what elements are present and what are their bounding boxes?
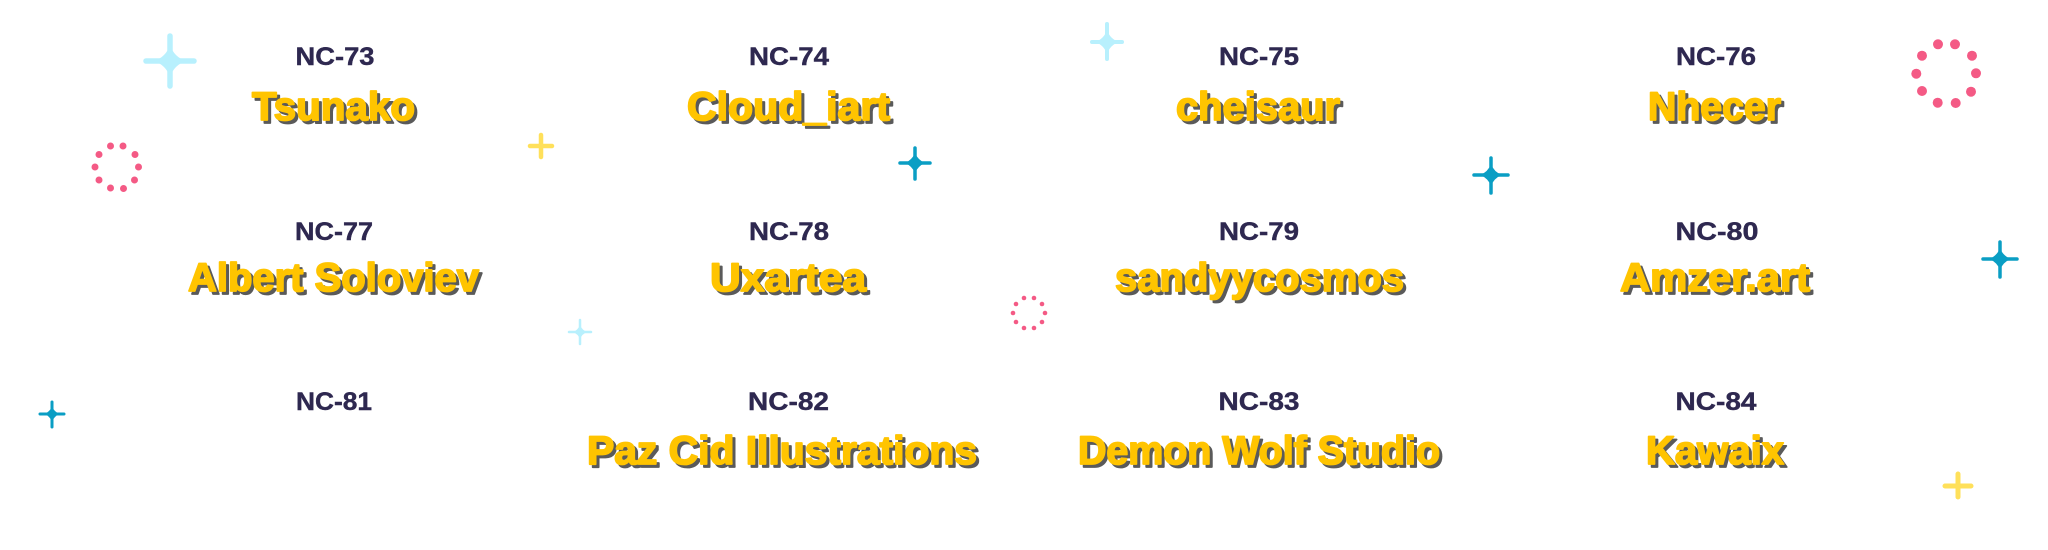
icon: yellow plus sparkle right	[1945, 474, 1971, 497]
label: NC-78: NC-78	[749, 218, 829, 246]
icon: light blue sparkle small	[569, 320, 591, 344]
label: NC-84: NC-84	[1676, 388, 1757, 416]
icon: pink dotted ring left	[92, 142, 142, 192]
name: Paz Cid Illustrations: Paz Cid Illustrations	[590, 432, 980, 476]
name: sandyycosmos: sandyycosmos	[1115, 256, 1404, 300]
label: NC-74: NC-74	[749, 43, 829, 71]
icon: pink dotted ring right	[1911, 39, 1981, 108]
label: NC-79: NC-79	[1219, 218, 1299, 246]
label: NC-80: NC-80	[1676, 218, 1758, 246]
label: NC-77: NC-77	[295, 218, 373, 246]
name: cheisaur: cheisaur	[1176, 85, 1340, 129]
icon: light blue sparkle large	[146, 36, 194, 86]
name: Amzer.art: Amzer.art	[1620, 256, 1810, 300]
name: Demon Wolf Studio: Demon Wolf Studio	[1078, 429, 1440, 473]
label: NC-76: NC-76	[1676, 43, 1756, 71]
name: Albert Soloviev: Albert Soloviev	[191, 259, 483, 303]
name: Albert Soloviev: Albert Soloviev	[188, 256, 480, 300]
name: Cloud_iart: Cloud_iart	[690, 88, 893, 132]
name: Tsunako: Tsunako	[252, 85, 415, 129]
name: Tsunako: Tsunako	[255, 88, 418, 132]
name: Amzer.art: Amzer.art	[1623, 259, 1813, 303]
name: Kawaix: Kawaix	[1649, 432, 1787, 476]
name: Nhecer: Nhecer	[1648, 85, 1781, 129]
label: NC-83: NC-83	[1218, 388, 1300, 416]
icon: teal sparkle	[900, 148, 930, 179]
name: Nhecer: Nhecer	[1651, 88, 1784, 132]
icon: teal sparkle left	[40, 402, 64, 427]
icon: teal sparkle	[1474, 158, 1508, 193]
name: Kawaix: Kawaix	[1646, 429, 1784, 473]
name: Uxartea: Uxartea	[713, 259, 870, 303]
name: sandyycosmos: sandyycosmos	[1118, 259, 1407, 303]
name: Paz Cid Illustrations: Paz Cid Illustrations	[587, 429, 977, 473]
name: cheisaur: cheisaur	[1179, 88, 1343, 132]
label: NC-81: NC-81	[296, 388, 372, 416]
icon: yellow plus sparkle	[530, 135, 552, 157]
icon: pink dotted ring small	[1011, 296, 1047, 330]
icon: light blue sparkle top	[1092, 24, 1122, 59]
name: Cloud_iart: Cloud_iart	[687, 85, 890, 129]
icon: teal sparkle right	[1983, 242, 2017, 277]
name: Uxartea: Uxartea	[710, 256, 867, 300]
label: NC-82: NC-82	[748, 388, 829, 416]
label: NC-73: NC-73	[296, 43, 374, 71]
label: NC-75: NC-75	[1219, 43, 1299, 71]
name: Demon Wolf Studio: Demon Wolf Studio	[1081, 432, 1443, 476]
